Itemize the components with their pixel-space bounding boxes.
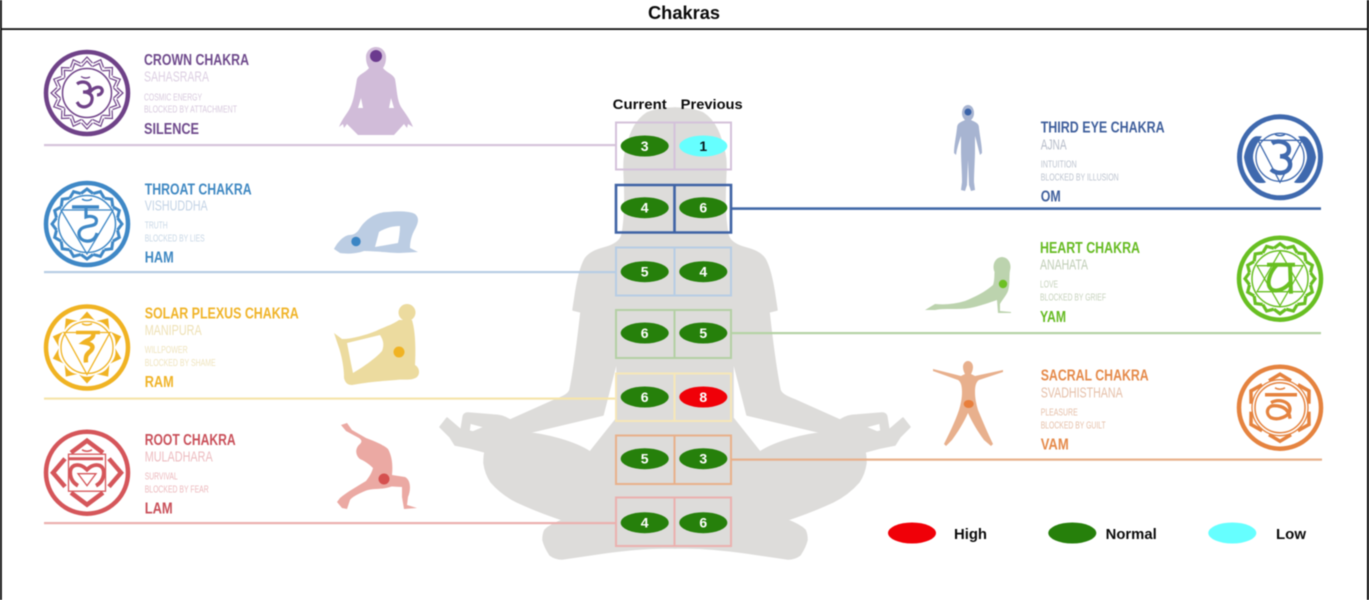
sacral chakra text: VAM bbox=[1041, 436, 1069, 453]
score row: root bbox=[616, 498, 731, 546]
score row: solar plexus: 6 bbox=[641, 389, 649, 405]
score row: crown: 3 bbox=[641, 138, 649, 154]
solar plexus chakra text: WILLPOWER bbox=[145, 345, 188, 356]
connector line bbox=[44, 271, 616, 273]
panel: throat chakra bbox=[44, 181, 616, 273]
solar plexus chakra text: RAM bbox=[145, 374, 174, 391]
icon: throat mandala bbox=[46, 183, 128, 265]
score row: solar plexus bbox=[616, 374, 731, 421]
score row: third eye: 4 bbox=[641, 200, 649, 216]
heart chakra text: BLOCKED BY GRIEF bbox=[1040, 292, 1106, 303]
throat chakra text: VISHUDDHA bbox=[145, 199, 208, 215]
root chakra text: SURVIVAL bbox=[145, 472, 178, 483]
third eye chakra text: AJNA bbox=[1041, 137, 1067, 153]
third eye chakra text: OM bbox=[1041, 188, 1061, 205]
solar plexus chakra text: SOLAR PLEXUS CHAKRA bbox=[145, 305, 299, 322]
sacral chakra text: SVADHISTHANA bbox=[1041, 385, 1123, 401]
column headers: Previous bbox=[681, 96, 743, 112]
icon: solar plexus mandala bbox=[46, 306, 128, 388]
panel: solar plexus chakra bbox=[44, 304, 616, 400]
connector line bbox=[731, 332, 1321, 334]
heart chakra text: HEART CHAKRA bbox=[1040, 240, 1140, 257]
panel: root chakra bbox=[44, 423, 616, 524]
heart chakra text: YAM bbox=[1040, 309, 1066, 326]
central meditating silhouette bbox=[440, 108, 910, 559]
icon: standing figure bbox=[954, 105, 982, 191]
root chakra text: ROOT CHAKRA bbox=[145, 432, 236, 449]
panel: sacral chakra bbox=[731, 361, 1322, 461]
score row: third eye bbox=[616, 185, 731, 232]
connector line bbox=[44, 522, 616, 524]
solar plexus chakra text: BLOCKED BY SHAME bbox=[145, 358, 216, 369]
icon: kneeling back-bend figure bbox=[334, 211, 418, 254]
score row: crown bbox=[616, 122, 731, 170]
score row: throat bbox=[616, 248, 731, 296]
solar plexus chakra text bbox=[145, 305, 299, 391]
throat chakra text: BLOCKED BY LIES bbox=[145, 234, 205, 245]
score row: sacral bbox=[616, 436, 731, 484]
sacral chakra text: SACRAL CHAKRA bbox=[1041, 368, 1149, 385]
sacral chakra text: BLOCKED BY GUILT bbox=[1041, 420, 1106, 431]
icon: third eye mandala bbox=[1240, 117, 1320, 198]
heart chakra text: LOVE bbox=[1040, 280, 1058, 291]
icon: crown mandala bbox=[46, 52, 128, 134]
third eye chakra text: THIRD EYE CHAKRA bbox=[1041, 120, 1165, 137]
sacral chakra text: PLEASURE bbox=[1041, 408, 1078, 419]
score row: solar plexus: 8 bbox=[699, 389, 707, 405]
crown chakra text: COSMIC ENERGY bbox=[144, 92, 202, 104]
panel: crown chakra bbox=[44, 47, 616, 146]
crown chakra text: SAHASRARA bbox=[144, 70, 209, 86]
heart chakra text: ANAHATA bbox=[1040, 257, 1088, 273]
connector line bbox=[731, 207, 1321, 210]
throat chakra text: HAM bbox=[145, 250, 174, 267]
score row: sacral: 3 bbox=[699, 451, 707, 467]
crown chakra text bbox=[144, 52, 249, 138]
sacral chakra text bbox=[1041, 368, 1149, 453]
third eye chakra text: INTUITION bbox=[1041, 160, 1077, 171]
icon: heart mandala bbox=[1239, 238, 1321, 320]
throat chakra text: THROAT CHAKRA bbox=[145, 181, 252, 198]
score row: throat: 5 bbox=[641, 264, 649, 280]
title: Chakras bbox=[648, 3, 720, 23]
third eye chakra text: BLOCKED BY ILLUSION bbox=[1041, 172, 1119, 183]
icon: root mandala bbox=[46, 432, 128, 514]
solar plexus chakra text: MANIPURA bbox=[145, 323, 202, 339]
icon: sacral mandala bbox=[1239, 367, 1321, 449]
score row: root: 4 bbox=[641, 515, 649, 531]
crown chakra text: SILENCE bbox=[144, 121, 199, 138]
score row: throat: 4 bbox=[699, 264, 707, 280]
connector line bbox=[731, 458, 1322, 461]
icon: seated figure bbox=[339, 47, 413, 135]
throat chakra text: TRUTH bbox=[145, 221, 168, 232]
score row: sacral: 5 bbox=[641, 451, 649, 467]
icon: seated twist figure bbox=[334, 304, 419, 385]
panel: heart chakra bbox=[731, 238, 1321, 334]
crown chakra text: CROWN CHAKRA bbox=[144, 52, 249, 69]
crown chakra text: BLOCKED BY ATTACHMENT bbox=[144, 105, 237, 116]
legend: High bbox=[954, 527, 987, 543]
score row: heart bbox=[616, 310, 731, 358]
legend: Normal bbox=[1106, 527, 1157, 543]
legend: Low bbox=[1276, 527, 1307, 543]
score row: heart: 5 bbox=[699, 325, 707, 341]
root chakra text: BLOCKED BY FEAR bbox=[145, 484, 209, 495]
score row: heart: 6 bbox=[641, 325, 649, 341]
connector line bbox=[44, 144, 616, 146]
root chakra text bbox=[145, 432, 236, 518]
score row: crown: 1 bbox=[699, 138, 707, 154]
icon: lunge figure bbox=[337, 423, 417, 509]
legend bbox=[888, 522, 1307, 544]
icon: star pose figure bbox=[933, 361, 1003, 446]
panel: third eye chakra bbox=[731, 105, 1321, 210]
column headers: Current bbox=[613, 96, 667, 112]
column headers bbox=[613, 96, 743, 112]
throat chakra text bbox=[145, 181, 252, 267]
score row: third eye: 6 bbox=[699, 200, 707, 216]
icon: cobra pose figure bbox=[925, 257, 1011, 313]
heart chakra text bbox=[1040, 240, 1140, 326]
score row: root: 6 bbox=[699, 515, 707, 531]
connector line bbox=[44, 398, 616, 400]
root chakra text: MULADHARA bbox=[145, 450, 213, 466]
third eye chakra text bbox=[1041, 120, 1165, 205]
root chakra text: LAM bbox=[145, 501, 173, 518]
